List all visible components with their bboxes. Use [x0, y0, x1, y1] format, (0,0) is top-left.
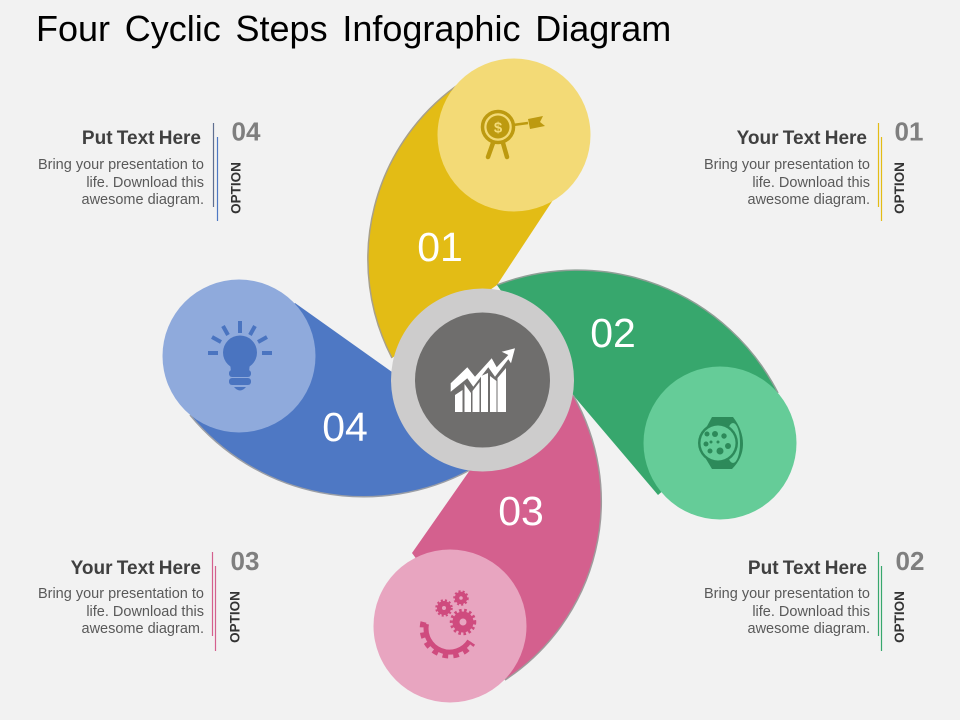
number 04: 04: [322, 404, 368, 450]
option 01: OPTION: [892, 162, 907, 214]
body 04: awesome diagram.: [82, 192, 204, 208]
icon: gears: [423, 592, 474, 656]
body 03: life. Download this: [86, 604, 204, 620]
text block 01: [704, 116, 923, 221]
body 01: awesome diagram.: [748, 192, 870, 208]
option 03: OPTION: [228, 591, 242, 643]
text block 02: [704, 546, 924, 651]
number 03 label: 03: [231, 546, 259, 576]
text block 03: [38, 546, 259, 651]
number 03: 03: [498, 488, 544, 534]
option 04: OPTION: [228, 162, 244, 214]
circle 02 with watch icon: [644, 366, 796, 520]
circle 04 with lightbulb icon: [162, 280, 316, 432]
icon: lightbulb: [208, 321, 272, 390]
number 01: 01: [417, 224, 463, 270]
body 04: Bring your presentation to: [38, 157, 204, 173]
option 02: OPTION: [892, 591, 907, 643]
number 01 label: 01: [895, 116, 923, 146]
icon: growth chart: [451, 348, 515, 412]
body 04: life. Download this: [86, 175, 204, 191]
circle 01 with target icon: [438, 58, 590, 212]
number 04 label: 04: [232, 116, 261, 146]
icon: dollar target with arrow: [482, 112, 545, 157]
body 02: life. Download this: [752, 604, 870, 620]
petal 03 pink: [412, 395, 601, 680]
petal 02 green: [497, 270, 778, 495]
heading 03: Your Text Here: [71, 558, 201, 579]
petal 01 yellow: [368, 82, 553, 358]
body 03: Bring your presentation to: [38, 586, 204, 602]
icon: dollar target with arrow: $: [494, 120, 503, 136]
petal 04 blue: [190, 303, 470, 497]
heading 04: Put Text Here: [82, 128, 201, 149]
title: Four Cyclic Steps Infographic Diagram: [36, 8, 671, 49]
centre hub: [391, 288, 574, 472]
body 01: Bring your presentation to: [704, 157, 870, 173]
body 02: Bring your presentation to: [704, 586, 870, 602]
body 03: awesome diagram.: [82, 621, 204, 637]
icon: watch: [698, 417, 743, 469]
body 01: life. Download this: [752, 175, 870, 191]
circle 03 with gears icon: [374, 550, 526, 702]
heading 01: Your Text Here: [737, 128, 867, 149]
text block 04: [38, 116, 261, 221]
body 02: awesome diagram.: [748, 621, 870, 637]
heading 02: Put Text Here: [748, 558, 867, 579]
number 02 label: 02: [896, 546, 924, 576]
number 02: 02: [590, 310, 636, 356]
